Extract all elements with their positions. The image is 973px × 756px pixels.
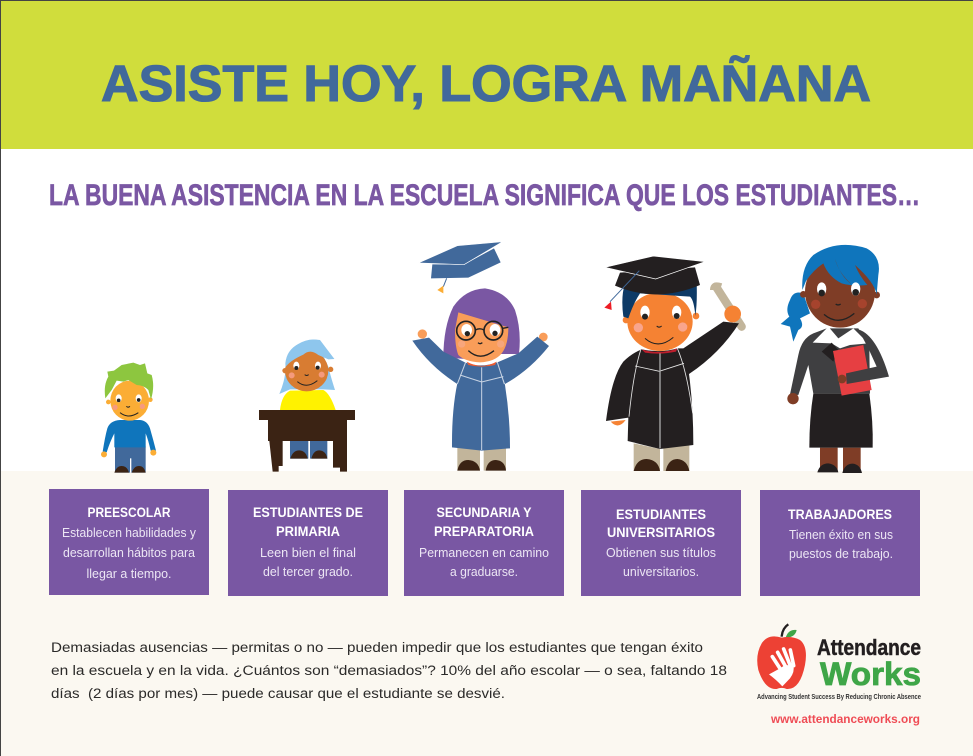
card: preescolar: PREESCOLAR — [88, 505, 171, 520]
card: trabajadores: TRABAJADORES — [788, 507, 892, 522]
header banner — [1, 1, 973, 149]
card: estudiantes de primaria — [228, 490, 388, 596]
card: secundaria y preparatoria: Permanecen en camino — [419, 546, 549, 560]
paragraph: Demasiadas ausencias — permitas o no — pueden impedir que los estudiantes que tengan éxito — [51, 640, 703, 656]
card: estudiantes universitarios — [581, 490, 741, 596]
card: preescolar: desarrollan hábitos para — [63, 546, 195, 560]
card: secundaria y preparatoria: a graduarse. — [450, 565, 518, 579]
bottom cream background — [0, 471, 973, 756]
card: trabajadores: Tienen éxito en sus — [789, 528, 893, 542]
card: estudiantes universitarios: Obtienen sus títulos — [606, 546, 716, 560]
figure: secondary student throwing cap — [412, 242, 549, 471]
card: preescolar: Establecen habilidades y — [62, 526, 197, 540]
card: trabajadores: puestos de trabajo. — [789, 547, 893, 561]
card: secundaria y preparatoria: PREPARATORIA — [434, 524, 534, 539]
card: estudiantes de primaria: ESTUDIANTES DE — [253, 505, 363, 520]
figure: university graduate — [604, 256, 742, 471]
figure: preschool child — [101, 363, 156, 473]
card: trabajadores — [760, 490, 920, 596]
card: estudiantes de primaria: PRIMARIA — [276, 524, 340, 539]
card: preescolar: llegar a tiempo. — [86, 567, 172, 581]
card: secundaria y preparatoria — [404, 490, 564, 596]
figure: primary student at desk — [259, 340, 355, 472]
logo: attendance works: www.attendanceworks.org — [770, 714, 920, 726]
card: preescolar — [49, 489, 209, 595]
paragraph: días (2 días por mes) — puede causar que el estudiante se desvié. — [51, 686, 505, 702]
figure: working professional — [781, 245, 889, 473]
card: secundaria y preparatoria: SECUNDARIA Y — [436, 505, 532, 520]
logo: attendance works: Attendance — [817, 635, 921, 660]
logo: attendance works — [757, 624, 921, 726]
paragraph: en la escuela y en la vida. ¿Cuántos son “demasiados”? 10% del año escolar — o sea, faltando 18 — [51, 663, 727, 679]
card: estudiantes universitarios: ESTUDIANTES — [616, 507, 706, 522]
card: estudiantes universitarios: UNIVERSITARIOS — [607, 525, 715, 540]
card: estudiantes de primaria: Leen bien el final — [260, 546, 356, 560]
icon: apple with hand — [757, 624, 806, 689]
title: ASISTE HOY, LOGRA MAÑANA — [101, 54, 871, 112]
card: estudiantes universitarios: universitarios. — [623, 565, 699, 579]
logo: attendance works: Works — [820, 656, 921, 692]
paragraph — [51, 640, 727, 702]
logo: attendance works: Advancing Student Success By Reducing Chronic Absence — [757, 692, 921, 701]
card: estudiantes de primaria: del tercer grado. — [263, 565, 353, 579]
